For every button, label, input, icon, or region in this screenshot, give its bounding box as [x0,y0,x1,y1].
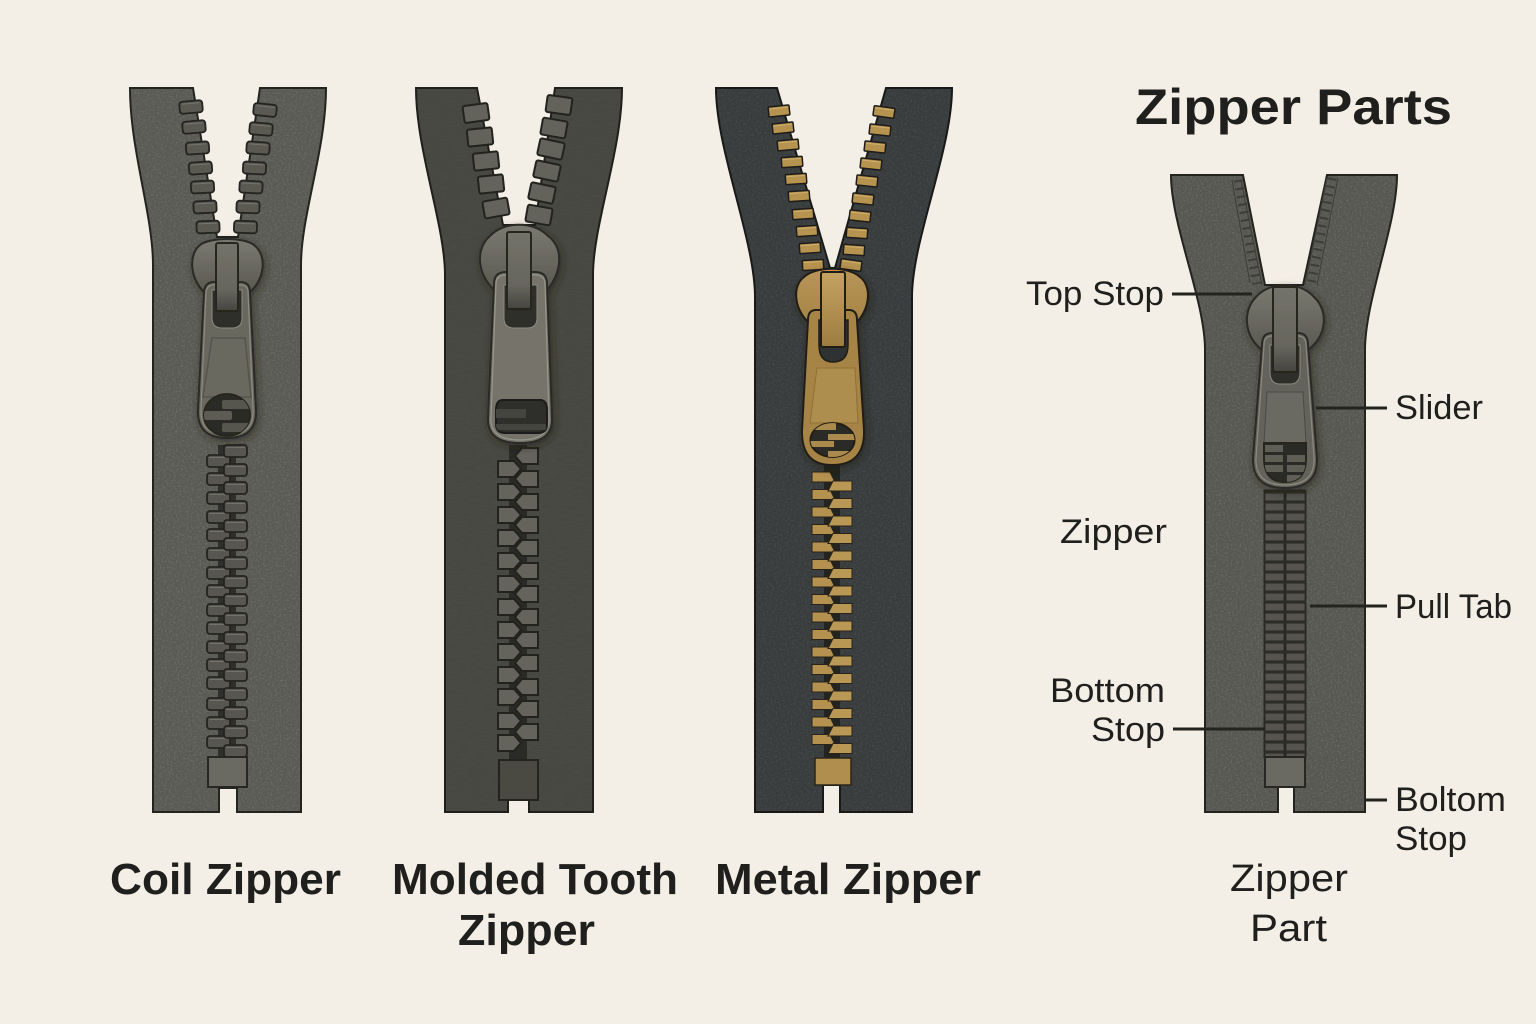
heading: Molded Tooth Zipper: Zipper [458,906,595,955]
molded tooth zipper tape [412,85,626,815]
molded upper teeth [462,95,573,226]
heading: Zipper Part: Part [1250,908,1327,950]
heading: Molded Tooth Zipper: Molded Tooth [392,855,678,904]
coil slider and pull tab [192,239,263,438]
zipper: metal [712,85,956,815]
label: Bottom Stop left [1050,672,1165,749]
coil zipper tape [125,85,330,815]
metal upper teeth [768,105,895,271]
heading: Metal Zipper: Metal Zipper [715,855,981,904]
heading: Molded Tooth Zipper [392,855,678,955]
parts bottom stop [1265,757,1305,787]
coil lower teeth [207,445,247,760]
heading: Zipper Part [1230,858,1348,950]
title: Zipper Parts: Zipper Parts [1135,79,1452,135]
label: Boltom Stop right: Stop [1395,820,1467,858]
zipper: parts diagram [1167,172,1401,815]
parts stitched edges [1232,178,1338,285]
molded slider and pull tab [480,225,559,443]
heading: Zipper Part: Zipper [1230,858,1348,900]
parts slider and pull tab [1247,285,1324,488]
metal bottom stop [815,758,851,785]
parts lower teeth [1264,490,1306,758]
zipper: coil [125,85,330,815]
label: Zipper: Zipper [1060,513,1167,551]
label: Boltom Stop right: Boltom [1395,781,1506,819]
metal zipper tape [712,85,956,815]
coil bottom stop [208,757,247,787]
heading: Coil Zipper: Coil Zipper [110,855,341,904]
molded lower teeth [498,445,538,763]
molded bottom stop [499,760,538,800]
coil upper teeth [179,100,277,233]
label: Top Stop: Top Stop [1026,275,1164,313]
label: Boltom Stop right [1395,781,1506,858]
leader lines [1172,294,1387,800]
label: Slider: Slider [1395,389,1483,427]
metal slider and pull tab [796,269,868,465]
label: Bottom Stop left: Stop [1091,711,1165,749]
label: Pull Tab: Pull Tab [1395,588,1512,626]
metal lower teeth [812,465,852,760]
zipper: molded tooth [412,85,626,815]
label: Bottom Stop left: Bottom [1050,672,1165,710]
parts zipper tape [1167,172,1401,815]
